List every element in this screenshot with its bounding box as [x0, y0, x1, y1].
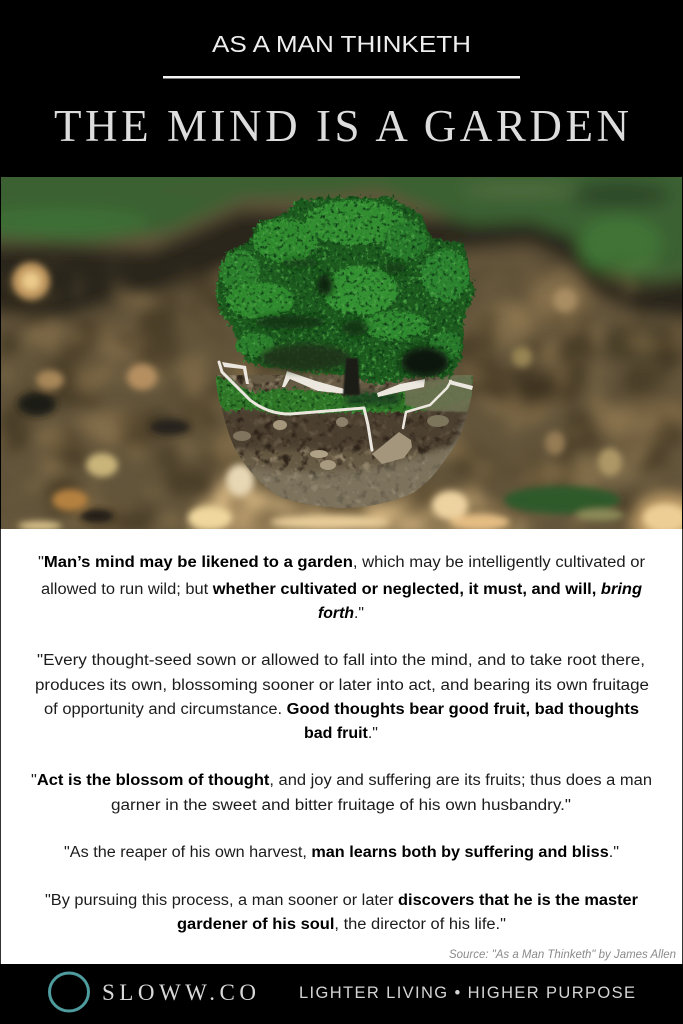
quote text block	[31, 554, 652, 933]
lower soil shading	[190, 480, 530, 530]
paragraph 1: forth."	[318, 605, 364, 622]
soil hemisphere	[212, 372, 477, 515]
paragraph 3	[31, 772, 652, 814]
white text panel	[0, 529, 683, 965]
paragraph 5	[45, 892, 638, 933]
photo: blurred soil background	[1, 177, 682, 529]
boulder	[372, 432, 412, 464]
paragraph 2	[35, 652, 649, 742]
paragraph 3: "Act is the blossom of thought , and joy and suffering are its fruits; thus does a man	[31, 772, 652, 789]
paragraph 2: "Every thought-seed sown or allowed to fall into the mind, and to take root there,	[37, 652, 645, 669]
title: THE MIND IS A GARDEN	[54, 101, 629, 151]
green band	[0, 160, 683, 282]
paragraph 5: "By pursuing this process, a man sooner or later discovers that he is the master	[45, 892, 638, 909]
paragraph 2: of opportunity and circumstance. Good thoughts bear good fruit, bad thoughts	[44, 701, 639, 718]
crown shadows	[254, 258, 449, 377]
tagline: LIGHTER LIVING • HIGHER PURPOSE	[299, 984, 635, 1002]
paragraph 1	[38, 554, 645, 622]
cracked glass front edge	[219, 362, 451, 450]
panel side edges	[0, 529, 682, 965]
tree crown	[217, 197, 475, 385]
header rule	[163, 76, 520, 78]
soil mottling	[0, 250, 683, 530]
cracked glass back shards	[222, 362, 473, 397]
illustration: tree in a glass sphere	[212, 197, 477, 515]
source note: Source: "As a Man Thinketh" by James Allen	[449, 947, 676, 961]
tree trunk	[343, 358, 360, 395]
footer band	[0, 964, 683, 1024]
paragraph 1: allowed to run wild; but whether cultivated or neglected, it must, and will, bring	[41, 581, 643, 598]
paragraph 2: bad fruit."	[304, 725, 378, 742]
grass layer	[216, 375, 472, 414]
paragraph 1: "Man’s mind may be likened to a garden , which may be intelligently cultivated or	[38, 554, 645, 571]
dark band	[0, 210, 683, 320]
paragraph 2: produces its own, blossoming sooner or later into act, and bearing its own fruitage	[35, 677, 649, 694]
header band	[0, 0, 683, 177]
logo ring	[50, 973, 88, 1011]
brand name: SLOWW.CO	[102, 980, 256, 1005]
kicker: as a man thinketh: AS A MAN THINKETH	[212, 31, 471, 57]
paragraph 5: gardener of his soul , the director of his life."	[177, 916, 506, 933]
paragraph 3: garner in the sweet and bitter fruitage of his own husbandry."	[111, 797, 571, 814]
paragraph 4: "As the reaper of his own harvest, man learns both by suffering and bliss ."	[64, 844, 619, 861]
